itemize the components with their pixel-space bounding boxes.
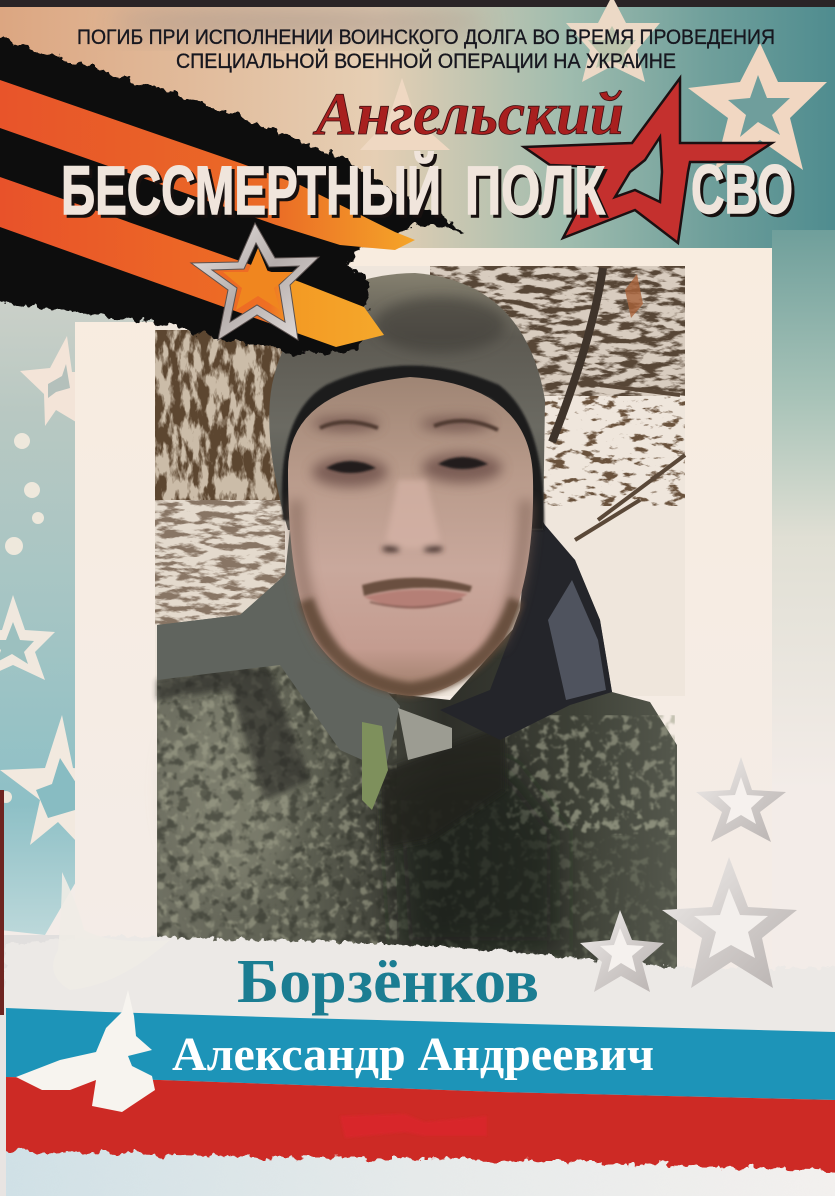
left edge dark line (0, 790, 4, 1015)
hood (157, 500, 612, 770)
jacket (157, 525, 677, 972)
hat (269, 273, 545, 530)
cheek shading (296, 500, 526, 650)
script title: Ангельский (312, 81, 624, 147)
beard (306, 600, 516, 690)
face (288, 377, 533, 696)
surname: Борзёнков (237, 948, 539, 1016)
black ribbon (0, 35, 463, 355)
decorative stars, top (360, 0, 827, 170)
silver stars, right (580, 757, 797, 992)
ribbon star (191, 223, 319, 340)
photo background: branches and snow (155, 266, 685, 625)
title: top lines: СПЕЦИАЛЬНОЙ ВОЕННОЙ ОПЕРАЦИИ НА УКРАИНЕ (176, 49, 676, 73)
mouth and moustache (362, 578, 472, 609)
faint dove, upper (53, 872, 170, 990)
orange ribbon stripes (0, 80, 415, 347)
given name: Александр Андреевич (172, 1028, 654, 1081)
main title: БЕССМЕРТНЫЙ (61, 151, 441, 229)
eyes (320, 421, 498, 473)
red army star emblem (524, 78, 772, 243)
title: top lines: ПОГИБ ПРИ ИСПОЛНЕНИИ ВОИНСКОГО ДОЛГА ВО ВРЕМЯ ПРОВЕДЕНИЯ (77, 26, 775, 49)
nose (382, 480, 443, 552)
dove, bottom (16, 990, 155, 1112)
redacted dates (340, 1114, 487, 1138)
shirt and green strip (362, 708, 452, 810)
main title: ПОЛК (465, 152, 606, 229)
left teal strip (0, 285, 155, 1015)
jacket camouflage (157, 650, 677, 970)
eye sockets (312, 417, 502, 487)
tricolour band (0, 1008, 835, 1196)
title: top lines (77, 26, 775, 73)
photo (155, 266, 685, 972)
torn light band below photo (5, 936, 835, 1040)
left side stars and dots (0, 336, 115, 860)
white frame behind photo (75, 248, 772, 1030)
